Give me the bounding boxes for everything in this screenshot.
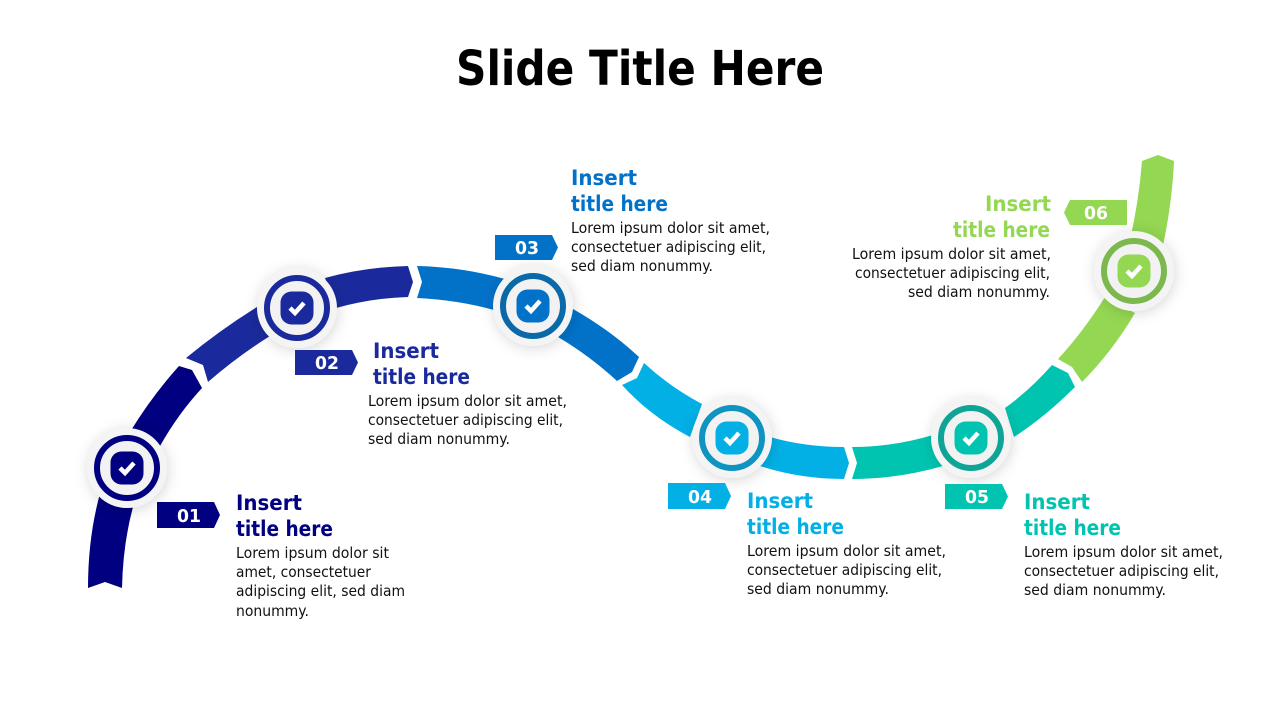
text block 01: Insert: [236, 491, 302, 515]
segment 02 upper: [325, 266, 413, 308]
text block 05: Insert: [1024, 490, 1090, 514]
tag 06: [1064, 200, 1127, 225]
text block 01: nonummy.: [236, 602, 309, 620]
text block 05: Lorem ipsum dolor sit amet,: [1024, 543, 1223, 561]
segment 01 upper: [130, 366, 202, 446]
title: Slide Title Here: [456, 41, 824, 97]
segment 02 lower: [186, 307, 270, 382]
text block 03: [571, 166, 770, 275]
tag 05: 05: [965, 487, 989, 508]
text block 04: Insert: [747, 489, 813, 513]
tag 05: [945, 484, 1008, 509]
text block 01: Lorem ipsum dolor sit: [236, 544, 389, 562]
text block 04: Lorem ipsum dolor sit amet,: [747, 542, 946, 560]
marker 01: [87, 428, 167, 508]
text block 03: title here: [571, 192, 668, 216]
tag 01: [157, 502, 220, 528]
segment 03 upper: [417, 266, 505, 310]
segment 04 lower: [760, 437, 849, 479]
marker 06: [1094, 231, 1174, 311]
text block 05: sed diam nonummy.: [1024, 581, 1166, 599]
tag 04: 04: [688, 487, 712, 508]
tag 03: [495, 235, 558, 260]
text block 02: [368, 339, 567, 448]
text block 02: consectetuer adipiscing elit,: [368, 411, 563, 429]
segment 05 upper: [1005, 365, 1075, 437]
marker 05: [931, 398, 1011, 478]
tag 02: [295, 350, 358, 375]
text block 01: amet, consectetuer: [236, 563, 372, 581]
tag 03: 03: [515, 238, 539, 259]
segment 06 lower: [1058, 297, 1135, 382]
marker 02: [257, 268, 337, 348]
text block 05: [1024, 490, 1223, 599]
text block 04: title here: [747, 515, 844, 539]
text block 06: sed diam nonummy.: [908, 283, 1050, 301]
text block 01: [236, 491, 405, 620]
marker 03: [493, 266, 573, 346]
tag 02: 02: [315, 353, 339, 374]
text block 06: consectetuer adipiscing elit,: [855, 264, 1050, 282]
segment 03 lower: [558, 309, 639, 381]
text block 03: sed diam nonummy.: [571, 257, 713, 275]
text block 04: consectetuer adipiscing elit,: [747, 561, 942, 579]
text block 06: Lorem ipsum dolor sit amet,: [852, 245, 1051, 263]
text block 05: consectetuer adipiscing elit,: [1024, 562, 1219, 580]
text block 03: consectetuer adipiscing elit,: [571, 238, 766, 256]
text block 06: title here: [953, 218, 1050, 242]
text block 02: title here: [373, 365, 470, 389]
marker 04: [692, 398, 772, 478]
tag 04: [668, 483, 731, 509]
tag 06: 06: [1084, 203, 1108, 224]
text block 04: [747, 489, 946, 598]
text block 02: Insert: [373, 339, 439, 363]
text block 06: Insert: [985, 192, 1051, 216]
text block 02: sed diam nonummy.: [368, 430, 510, 448]
text block 04: sed diam nonummy.: [747, 580, 889, 598]
text block 01: adipiscing elit, sed diam: [236, 582, 405, 600]
text block 05: title here: [1024, 516, 1121, 540]
segment 06 upper: [1130, 155, 1174, 250]
text block 03: Lorem ipsum dolor sit amet,: [571, 219, 770, 237]
segment 05 lower: [852, 435, 943, 479]
winding path ribbon: [88, 155, 1174, 588]
segment 04 upper: [622, 363, 702, 437]
text block 01: title here: [236, 517, 333, 541]
text block 02: Lorem ipsum dolor sit amet,: [368, 392, 567, 410]
text block 03: Insert: [571, 166, 637, 190]
tag 01: 01: [177, 506, 201, 527]
text block 06: [852, 192, 1051, 301]
segment 01 lower: [88, 490, 135, 588]
